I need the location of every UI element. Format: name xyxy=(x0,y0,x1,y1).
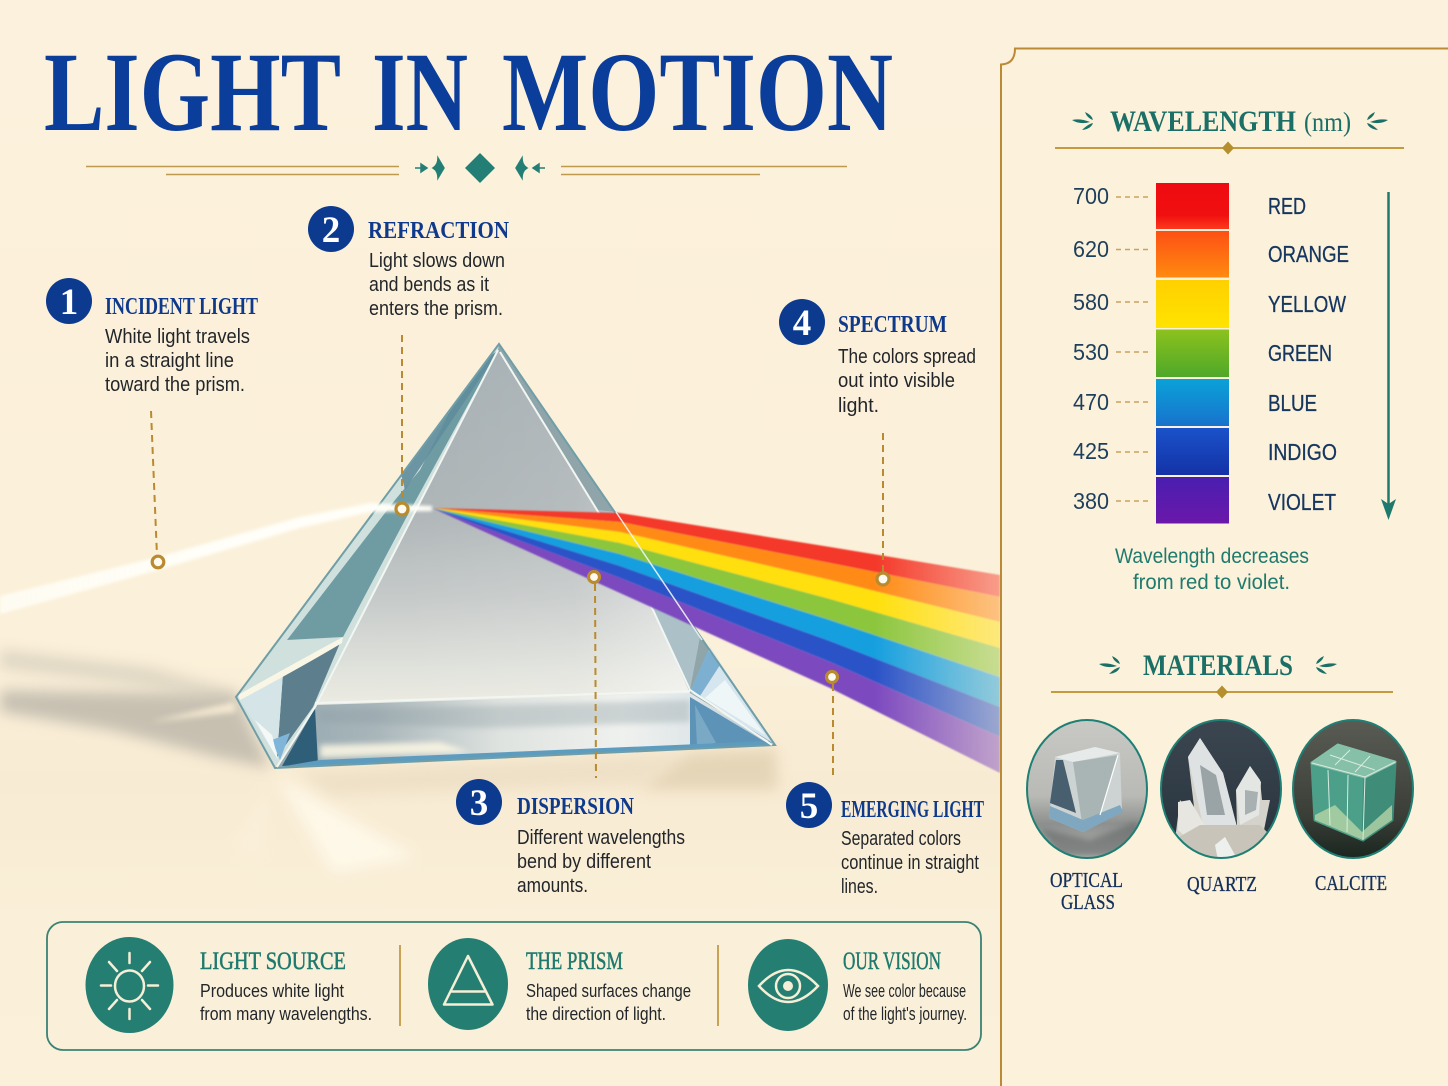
prism base facet xyxy=(277,693,773,767)
light source text: LIGHT SOURCE xyxy=(200,948,346,975)
the prism text: THE PRISM xyxy=(526,948,623,975)
heading 3: DISPERSION xyxy=(517,794,635,820)
table light rays xyxy=(232,776,416,873)
quartz image xyxy=(1161,720,1281,865)
wavelength numbers: 700 xyxy=(1073,183,1109,209)
prism front face xyxy=(315,350,690,707)
callout 1: incident light: 1 xyxy=(60,282,78,323)
body 2: and bends as it xyxy=(369,274,489,296)
title ornament xyxy=(86,153,847,183)
materials heading: MATERIALS xyxy=(1143,649,1293,682)
wavelength numbers: 470 xyxy=(1073,389,1109,415)
icon: sun xyxy=(86,937,174,1033)
wavelength heading: (nm) xyxy=(1304,107,1351,137)
body 3: Different wavelengths xyxy=(517,827,685,849)
rainbow beam xyxy=(432,508,1000,773)
body 2 xyxy=(369,250,505,320)
body 1: toward the prism. xyxy=(105,374,245,396)
icon: eye xyxy=(748,939,828,1031)
heading 1: INCIDENT LIGHT xyxy=(105,294,258,320)
marker circle 4 xyxy=(779,299,825,345)
callout 5: emerging light: 5 xyxy=(800,786,818,827)
sprig left xyxy=(1099,656,1120,674)
label: GLASS xyxy=(1061,890,1115,914)
wavelength numbers: 425 xyxy=(1073,438,1109,464)
color names: ORANGE xyxy=(1268,241,1349,267)
title: MOTION xyxy=(502,30,893,155)
color names: YELLOW xyxy=(1268,291,1346,317)
right panel frame xyxy=(998,44,1448,1086)
body 3 xyxy=(517,827,685,897)
heading 5: EMERGING LIGHT xyxy=(841,797,984,823)
marker circle 5 xyxy=(786,782,832,828)
wavelength heading xyxy=(1055,105,1404,154)
material: optical glass xyxy=(1027,720,1147,914)
color bar xyxy=(1156,183,1229,524)
callout 1: incident light xyxy=(46,278,258,568)
our vision text: OUR VISION xyxy=(843,948,941,975)
prism left facet xyxy=(236,344,499,768)
light source text xyxy=(200,948,372,1024)
materials heading xyxy=(1051,649,1393,698)
prism right facet xyxy=(498,344,775,745)
chart caption: from red to violet. xyxy=(1133,571,1290,594)
marker circle 1 xyxy=(46,278,92,324)
body 3: bend by different xyxy=(517,851,651,873)
leader 4 xyxy=(877,433,889,585)
material: calcite xyxy=(1293,720,1413,895)
body 5: lines. xyxy=(841,876,878,898)
leader 2 xyxy=(396,335,408,515)
chart caption: Wavelength decreases xyxy=(1115,545,1309,568)
wavelength numbers: 620 xyxy=(1073,236,1109,262)
leader 1 xyxy=(151,411,164,568)
marker circle 3 xyxy=(456,779,502,825)
arrow: decreasing wavelength xyxy=(1381,192,1396,520)
leader 5 xyxy=(826,672,838,778)
table shadows xyxy=(0,650,778,795)
color names xyxy=(1268,193,1349,515)
body 1: in a straight line xyxy=(105,350,234,372)
callout 2: refraction: 2 xyxy=(322,210,340,251)
label: QUARTZ xyxy=(1187,872,1257,896)
sprig right xyxy=(1316,656,1337,674)
light source text: from many wavelengths. xyxy=(200,1003,372,1024)
the prism text: Shaped surfaces change xyxy=(526,980,691,1001)
light source text: Produces white light xyxy=(200,980,344,1001)
body 4 xyxy=(838,346,976,417)
chart caption xyxy=(1115,545,1309,594)
title xyxy=(44,30,893,155)
wavelength heading: WAVELENGTH xyxy=(1110,105,1296,138)
title: IN xyxy=(372,30,468,155)
label xyxy=(1050,868,1123,914)
bottom panel xyxy=(47,922,981,1050)
the prism text: the direction of light. xyxy=(526,1003,666,1024)
our vision text xyxy=(843,948,967,1024)
body 2: Light slows down xyxy=(369,250,505,272)
color names: BLUE xyxy=(1268,390,1317,416)
prism edges xyxy=(236,344,775,768)
color names: RED xyxy=(1268,193,1306,219)
calcite image xyxy=(1293,720,1413,858)
marker circle 2 xyxy=(308,206,354,252)
body 1 xyxy=(105,326,250,396)
our vision text: We see color because xyxy=(843,980,966,1001)
icon: prism xyxy=(428,938,508,1030)
body 5 xyxy=(841,828,979,898)
glass image xyxy=(1027,720,1147,858)
title: LIGHT xyxy=(44,30,341,155)
body 4: light. xyxy=(838,395,879,417)
wavelength numbers: 380 xyxy=(1073,488,1109,514)
label: CALCITE xyxy=(1315,871,1387,895)
body 4: out into visible xyxy=(838,370,955,392)
callout 3: dispersion xyxy=(456,572,685,897)
label: OPTICAL xyxy=(1050,868,1123,892)
white light beam xyxy=(0,503,432,614)
leader 3 xyxy=(588,572,600,778)
wavelength numbers: 530 xyxy=(1073,339,1109,365)
body 1: White light travels xyxy=(105,326,250,348)
callout 4: spectrum xyxy=(779,299,976,585)
sprig right xyxy=(1367,112,1388,130)
body 5: continue in straight xyxy=(841,852,979,874)
callout 4: spectrum: 4 xyxy=(793,303,811,344)
color names: VIOLET xyxy=(1268,489,1336,515)
body 2: enters the prism. xyxy=(369,298,503,320)
the prism text xyxy=(526,948,691,1024)
wavelength numbers xyxy=(1073,183,1109,514)
glass prism xyxy=(236,344,775,768)
body 4: The colors spread xyxy=(838,346,976,368)
our vision text: of the light's journey. xyxy=(843,1003,967,1024)
heading 2: REFRACTION xyxy=(368,218,510,244)
callout 3: dispersion: 3 xyxy=(470,783,488,824)
body 5: Separated colors xyxy=(841,828,961,850)
callout 2: refraction xyxy=(308,206,510,515)
material: quartz xyxy=(1161,720,1281,896)
callout 5: emerging light xyxy=(786,672,984,898)
color names: GREEN xyxy=(1268,340,1332,366)
wavelength spectrum chart xyxy=(1073,183,1396,594)
prism exit edge highlight xyxy=(616,512,702,640)
sprig left xyxy=(1072,112,1093,130)
wavelength numbers: 580 xyxy=(1073,289,1109,315)
heading 4: SPECTRUM xyxy=(838,312,947,338)
body 3: amounts. xyxy=(517,875,588,897)
color names: INDIGO xyxy=(1268,439,1337,465)
